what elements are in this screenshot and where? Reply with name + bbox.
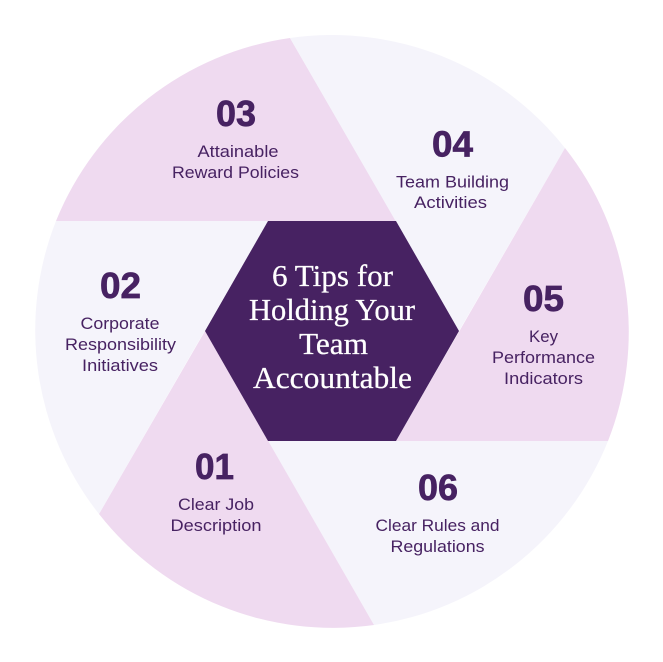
panel: 02 corporate responsibility initiatives: Corporate <box>80 314 160 333</box>
panel: 03 attainable reward policies: Reward Policies <box>172 163 299 182</box>
panel: 04 team building activities: 04 <box>432 124 473 164</box>
panel: 05 key performance indicators: Indicators <box>504 369 583 388</box>
panel: 04 team building activities <box>290 35 565 331</box>
panel: 02 corporate responsibility initiatives <box>35 221 268 514</box>
panel: 01 clear job description: Clear Job <box>178 495 254 514</box>
panel: 06 clear rules and regulations: Clear Rules and <box>376 516 500 535</box>
panel: 03 attainable reward policies: 03 <box>216 93 256 134</box>
center hexagon with title: Holding Your <box>249 292 416 327</box>
panel: 02 corporate responsibility initiatives: Initiatives <box>82 356 158 375</box>
panel: 04 team building activities: Activities <box>414 193 487 212</box>
center hexagon with title: 6 Tips for <box>272 258 394 293</box>
panel: 05 key performance indicators: Key <box>529 327 558 346</box>
panel: 03 attainable reward policies: Attainable <box>198 142 278 161</box>
panel: 02 corporate responsibility initiatives: 02 <box>100 265 141 306</box>
panel: 05 key performance indicators <box>396 148 629 441</box>
panel: 03 attainable reward policies <box>56 38 396 221</box>
panel: 05 key performance indicators: 05 <box>523 278 564 319</box>
panel: 06 clear rules and regulations <box>268 441 608 625</box>
panel: 02 corporate responsibility initiatives: Responsibility <box>65 335 177 354</box>
panel: 06 clear rules and regulations: 06 <box>418 467 458 508</box>
center hexagon with title <box>205 221 459 441</box>
panel: 06 clear rules and regulations: Regulations <box>390 537 484 556</box>
panel: 01 clear job description <box>99 331 374 628</box>
center hexagon with title: Accountable <box>253 360 412 395</box>
panel: 04 team building activities: Team Building <box>396 172 509 192</box>
panel: 05 key performance indicators: Performance <box>492 348 595 367</box>
panel: 01 clear job description: Description <box>170 516 262 535</box>
center hexagon with title: Team <box>299 326 368 361</box>
panel: 01 clear job description: 01 <box>195 446 234 487</box>
